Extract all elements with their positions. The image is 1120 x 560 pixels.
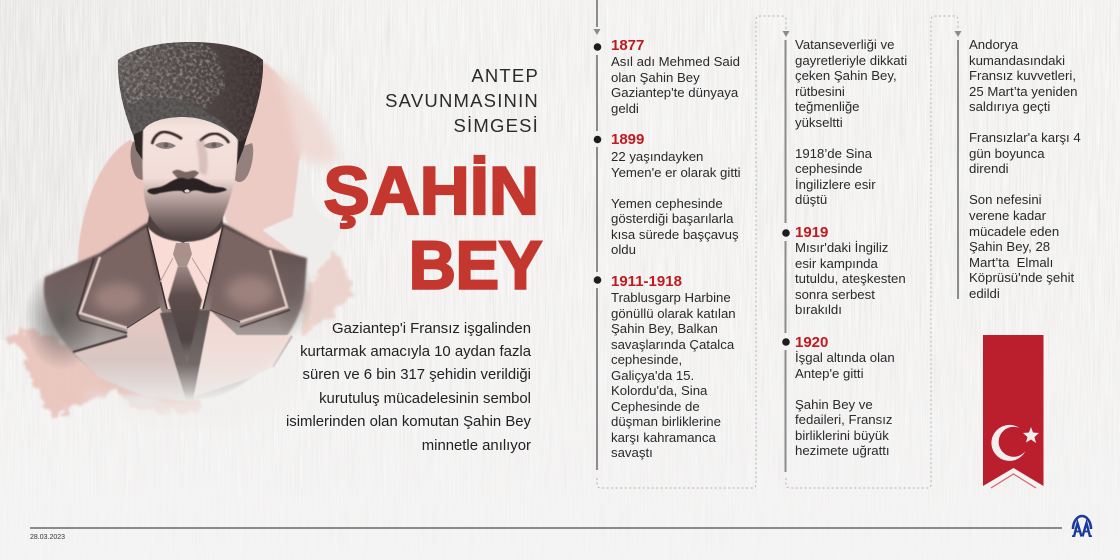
timeline column 2: Mısır'daki İngiliz esir kampında tutuldu, ateşkesten sonra serbest bırakıldı bbox=[795, 240, 906, 317]
facial features bbox=[147, 132, 229, 194]
neck bbox=[147, 205, 223, 242]
kalpak hat bbox=[118, 42, 263, 142]
heading: name bbox=[324, 154, 544, 300]
timeline column 2: İşgal altında olan Antep'e gitti Şahin Bey ve fedaileri, Fransız birliklerini büyük hezimete uğrattı bbox=[795, 350, 895, 458]
intro paragraph: Gaziantep'i Fransız işgalinden kurtarmak amacıyla 10 aydan fazla süren ve 6 bin 317 şehidin verildiği kurutuluş mücadelesinin sembol isimlerinden olan komutan Şahin Bey minnetle anılıyor bbox=[286, 320, 531, 454]
timeline column 1: Asıl adı Mehmed Said olan Şahin Bey Gaziantep'te dünyaya geldi bbox=[611, 54, 740, 116]
pink flag crescent motif bbox=[8, 62, 352, 416]
heading: subtitle: ANTEP SAVUNMASININ SİMGESİ bbox=[385, 65, 539, 136]
lapel edge lines bbox=[80, 257, 127, 328]
face bbox=[142, 116, 238, 240]
timeline column 2: Vatanseverliği ve gayretleriyle dikkati çeken Şahin Bey, rütbesini teğmenliğe yükseltti 1918’de Sina cephesinde İngilizlere esir düştü bbox=[795, 37, 907, 207]
timeline column 1: 1877 bbox=[611, 37, 644, 54]
lower jacket panels bbox=[73, 307, 193, 397]
date: 28.03.2023 bbox=[30, 534, 65, 541]
timeline column 2: 1920 bbox=[795, 334, 828, 351]
ears bbox=[131, 140, 253, 182]
timeline column 1: 1899 bbox=[611, 131, 644, 148]
shirt collar, vest and tie bbox=[147, 226, 223, 400]
jacket and shoulders bbox=[24, 223, 314, 401]
temple hair bbox=[133, 126, 247, 165]
footer rule bbox=[30, 527, 1062, 529]
timeline column 1: 1911-1918 bbox=[611, 273, 682, 290]
lapel panels bbox=[80, 227, 160, 328]
timeline column 1: 22 yaşındayken Yemen'e er olarak gitti Yemen cephesinde gösterdiği başarılarla kısa sürede başçavuş oldu bbox=[611, 149, 741, 257]
heading: name: ŞAHİN bbox=[324, 154, 539, 229]
white brush fade around portrait bbox=[80, 345, 300, 428]
timeline column 2: 1919 bbox=[795, 224, 828, 241]
timeline column 1 bbox=[611, 37, 741, 460]
icon: AA logo bbox=[1072, 514, 1092, 537]
icon: Turkish flag banner bbox=[983, 335, 1044, 488]
timeline column 3: Andorya kumandasındaki Fransız kuvvetleri, 25 Mart’ta yeniden saldırıya geçti Fransızlar'a karşı 4 gün boyunca direndi Son nefesini verene kadar mücadele eden Şahin Bey, 28 Mart’ta Elmalı Köprüsü'nde şehit edildi bbox=[969, 37, 1081, 301]
timeline column 1: Trablusgarp Harbine gönüllü olarak katılan Şahin Bey, Balkan savaşlarında Çatalca cephesinde, Galiçya'da 15. Kolordu'da, Sina Cephesinde de düşman birliklerine karşı kahramanca savaştı bbox=[611, 290, 736, 460]
timeline column 2 bbox=[795, 37, 907, 458]
white star in flag bbox=[263, 158, 345, 290]
portrait of Şahin Bey over flag motif bbox=[5, 42, 354, 420]
